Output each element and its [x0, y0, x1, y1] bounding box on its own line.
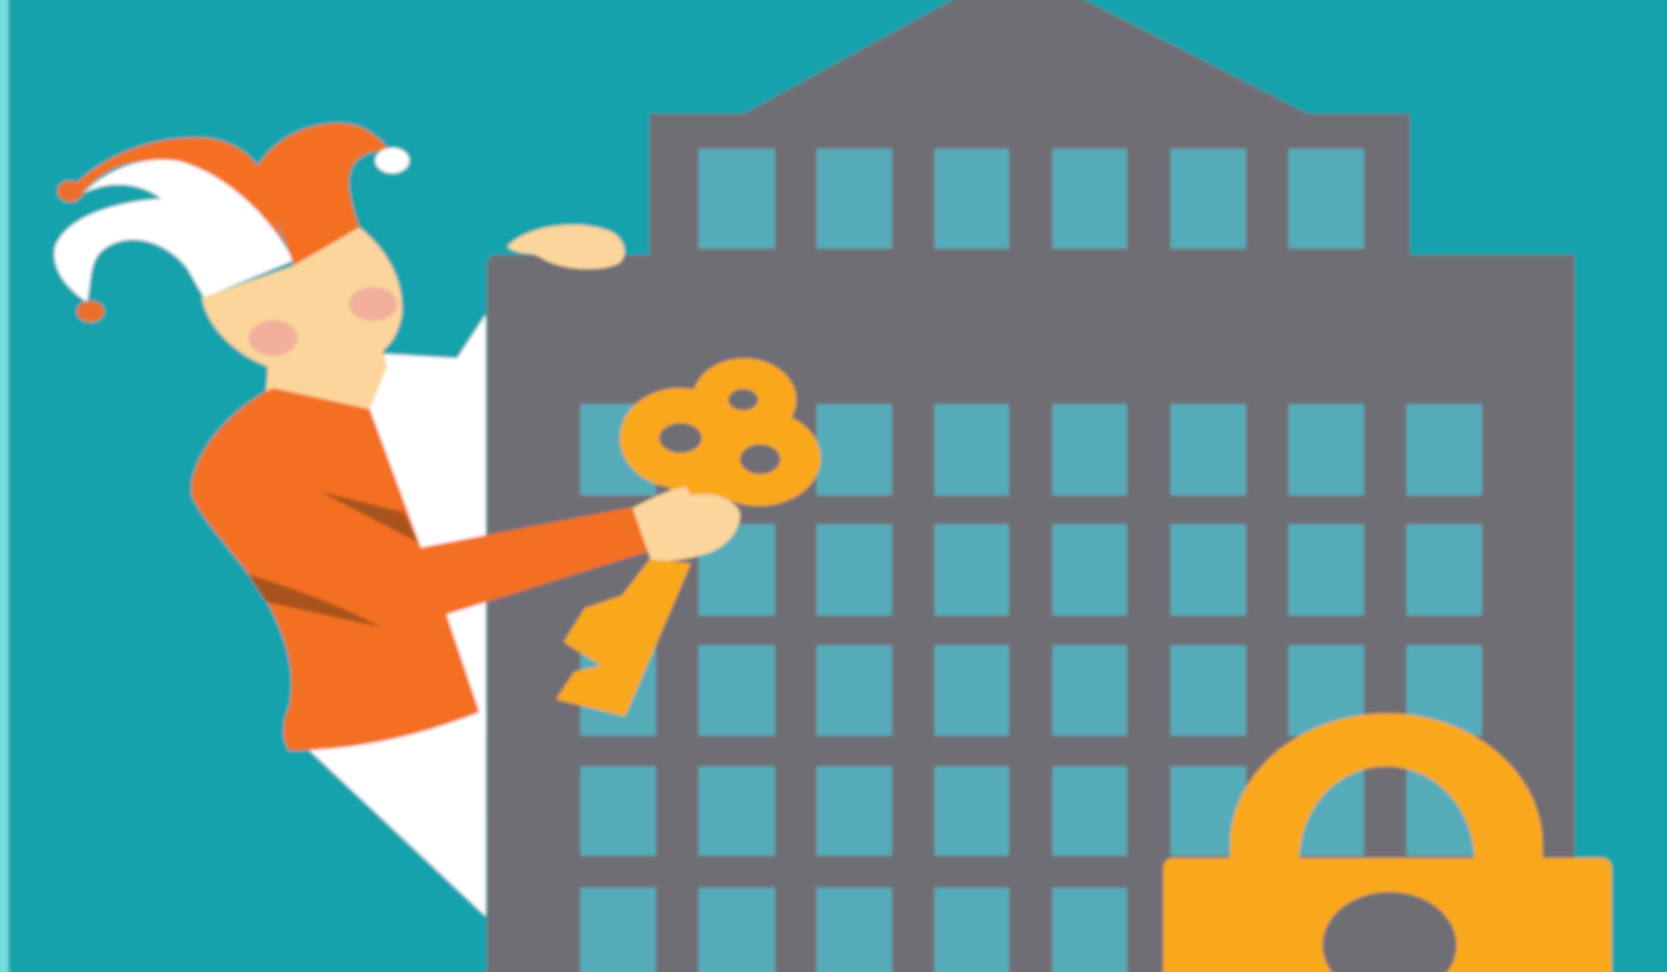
white shirt and legs [356, 315, 486, 734]
padlock [1163, 713, 1612, 972]
hat: orange front flap [255, 123, 389, 266]
key head [620, 358, 821, 506]
cheeks [349, 287, 398, 321]
fingers over the building [507, 225, 625, 269]
lock body [1163, 858, 1612, 972]
orange tunic and arm [191, 388, 651, 751]
building [487, 0, 1575, 972]
hat bells [375, 148, 409, 173]
key [556, 358, 821, 717]
face [202, 228, 402, 417]
tunic folds [319, 491, 418, 542]
shackle [1230, 713, 1543, 863]
left edge stripe [0, 0, 9, 972]
jester [54, 123, 651, 916]
hat: orange back band [77, 138, 287, 255]
key holes [659, 423, 702, 453]
hat: white flap [54, 160, 293, 302]
hand holding key [633, 487, 740, 560]
keyhole [1323, 892, 1456, 972]
windows [580, 149, 1482, 972]
key shaft and teeth [556, 558, 691, 717]
building body [487, 0, 1575, 972]
